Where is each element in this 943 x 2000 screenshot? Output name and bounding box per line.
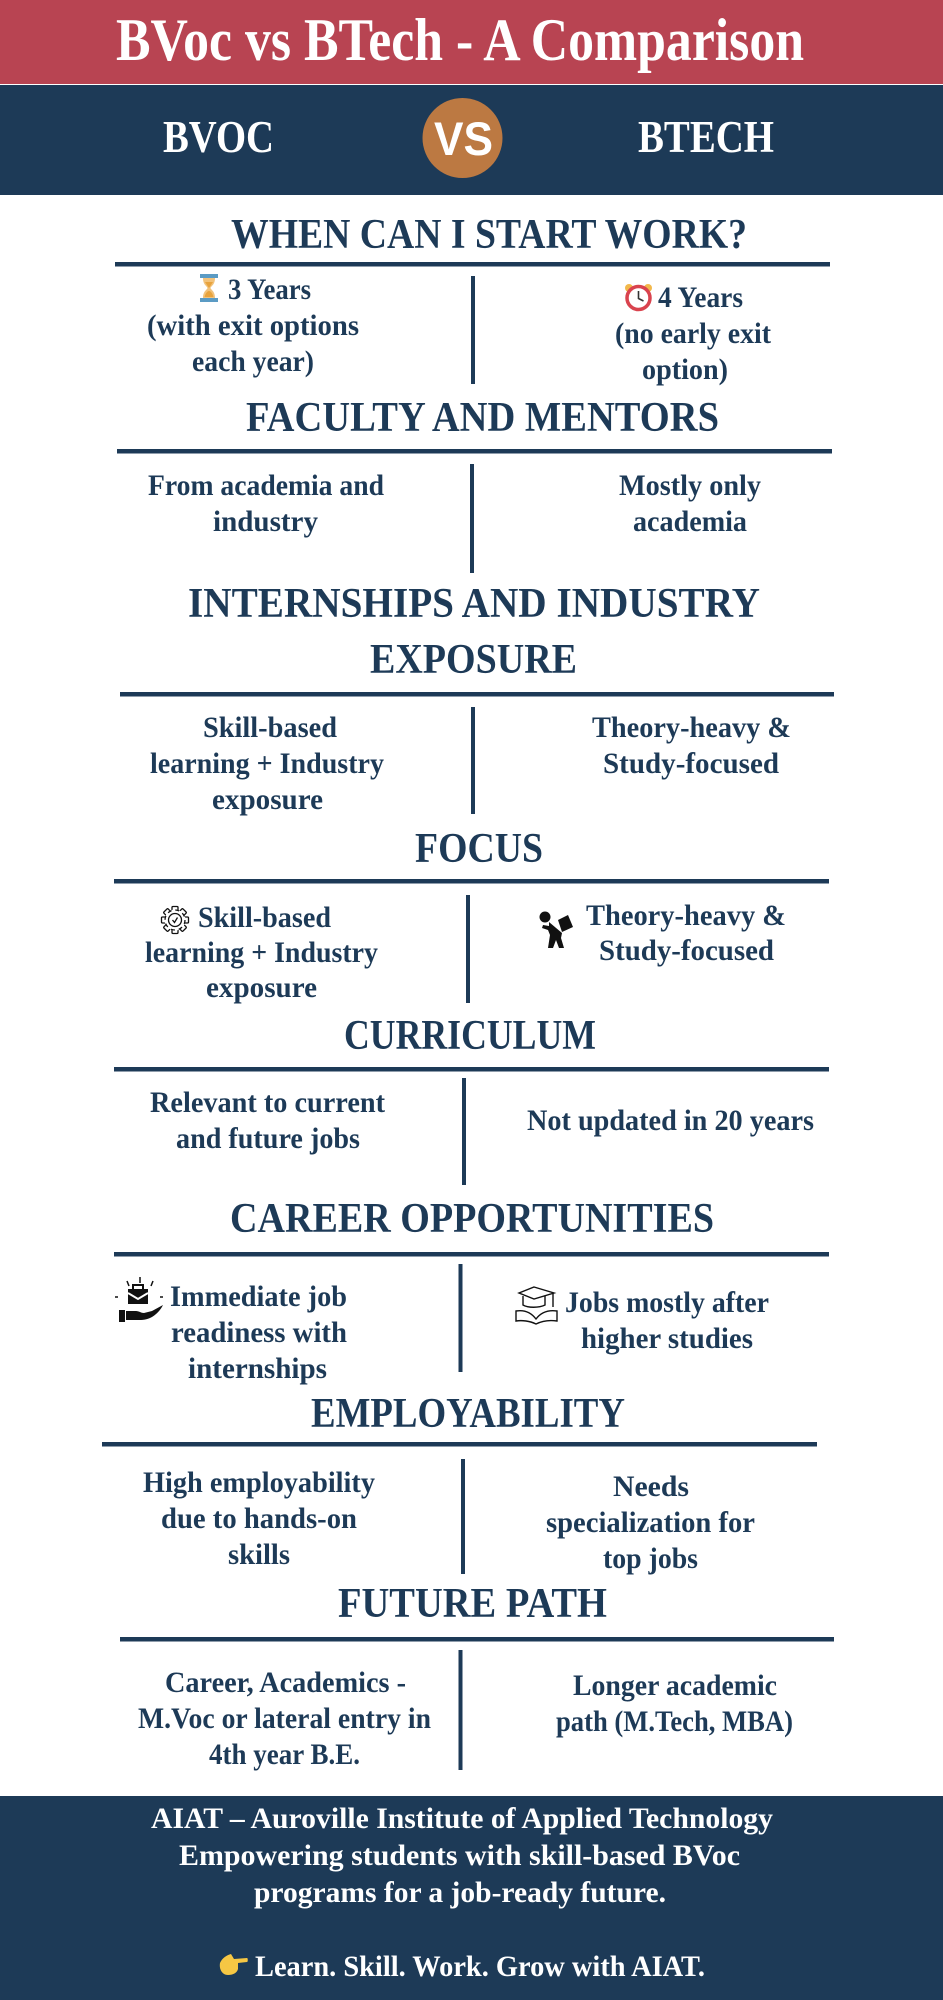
panel: career opportunities: internships <box>188 1353 327 1385</box>
panel: internships and industry exposure: EXPOSURE <box>370 637 577 683</box>
panel: internships and industry exposure: Study-focused <box>603 748 780 780</box>
panel: future path: path (M.Tech, MBA) <box>556 1706 793 1738</box>
panel: faculty and mentors: FACULTY AND MENTORS <box>246 395 719 441</box>
panel: faculty and mentors: industry <box>213 506 318 538</box>
icon: person carrying load <box>540 912 573 948</box>
panel: when can I start work: option) <box>642 354 728 386</box>
panel: focus: exposure <box>206 972 317 1004</box>
panel: focus <box>114 826 829 1004</box>
panel: future path: Career, Academics - <box>165 1667 406 1699</box>
panel: focus: Skill-based <box>198 902 332 934</box>
panel: future path <box>120 1581 834 1771</box>
panel: internships and industry exposure: INTERNSHIPS AND INDUSTRY <box>188 581 760 627</box>
panel: curriculum: and future jobs <box>176 1123 360 1155</box>
panel: future path: FUTURE PATH <box>338 1581 607 1627</box>
footer: Empowering students with skill-based BVoc <box>179 1840 740 1872</box>
icon: alarm clock <box>625 284 652 310</box>
panel: employability <box>102 1391 817 1575</box>
panel: when can I start work: WHEN CAN I START WORK? <box>231 212 747 258</box>
panel: future path: Longer academic <box>573 1670 777 1702</box>
panel: employability: due to hands-on <box>161 1503 357 1535</box>
icon: gear <box>162 906 188 934</box>
panel: career opportunities: higher studies <box>581 1323 753 1355</box>
panel: career opportunities: Immediate job <box>170 1281 347 1313</box>
panel: focus: learning + Industry <box>145 937 378 969</box>
panel: employability: High employability <box>143 1467 375 1499</box>
panel: faculty and mentors: From academia and <box>148 470 385 502</box>
panel: future path: 4th year B.E. <box>209 1739 360 1771</box>
footer <box>0 1796 943 2000</box>
versus header band: BVOC <box>163 112 274 162</box>
panel: when can I start work: 4 Years <box>658 282 743 314</box>
panel: internships and industry exposure <box>120 581 834 816</box>
panel: career opportunities: Jobs mostly after <box>565 1287 769 1319</box>
panel: future path: M.Voc or lateral entry in <box>138 1703 431 1735</box>
icon: graduation cap on book <box>516 1287 557 1324</box>
footer: AIAT – Auroville Institute of Applied Technology <box>151 1803 773 1835</box>
panel: career opportunities: CAREER OPPORTUNITIES <box>230 1196 714 1242</box>
panel: faculty and mentors: academia <box>633 506 747 538</box>
panel: internships and industry exposure: Skill-based <box>203 712 338 744</box>
panel: internships and industry exposure: Theory-heavy & <box>592 712 791 744</box>
panel: employability: top jobs <box>603 1543 698 1575</box>
panel: faculty and mentors <box>117 395 832 573</box>
icon: hand holding briefcase <box>115 1277 163 1322</box>
panel: when can I start work: (no early exit <box>615 318 771 350</box>
panel: employability: specialization for <box>546 1507 755 1539</box>
panel: when can I start work: 3 Years <box>228 274 311 306</box>
panel: focus: Theory-heavy & <box>586 900 786 932</box>
footer: programs for a job-ready future. <box>254 1877 666 1909</box>
versus header band <box>0 85 943 195</box>
icon: pointing hand <box>220 1954 248 1975</box>
panel: curriculum: Not updated in 20 years <box>527 1105 814 1137</box>
panel: employability: EMPLOYABILITY <box>311 1391 625 1437</box>
panel: curriculum: CURRICULUM <box>344 1013 596 1059</box>
panel: career opportunities: readiness with <box>171 1317 347 1349</box>
icon: hourglass <box>200 274 218 302</box>
title banner: BVoc vs BTech - A Comparison <box>116 7 804 73</box>
panel: employability: skills <box>228 1539 290 1571</box>
versus header band: VS <box>434 112 493 165</box>
panel: when can I start work <box>115 212 830 386</box>
panel: employability: Needs <box>613 1471 689 1503</box>
panel: internships and industry exposure: learning + Industry <box>150 748 384 780</box>
panel: focus: Study-focused <box>599 935 775 967</box>
panel: when can I start work: (with exit options <box>147 310 359 342</box>
panel: focus: FOCUS <box>415 826 543 872</box>
panel: career opportunities <box>114 1196 829 1385</box>
panel: curriculum <box>114 1013 829 1185</box>
versus header band: BTECH <box>638 112 774 162</box>
panel: when can I start work: each year) <box>192 346 314 378</box>
footer: Learn. Skill. Work. Grow with AIAT. <box>255 1951 705 1983</box>
panel: curriculum: Relevant to current <box>150 1087 385 1119</box>
title banner <box>0 0 943 84</box>
panel: faculty and mentors: Mostly only <box>619 470 761 502</box>
panel: internships and industry exposure: exposure <box>212 784 323 816</box>
